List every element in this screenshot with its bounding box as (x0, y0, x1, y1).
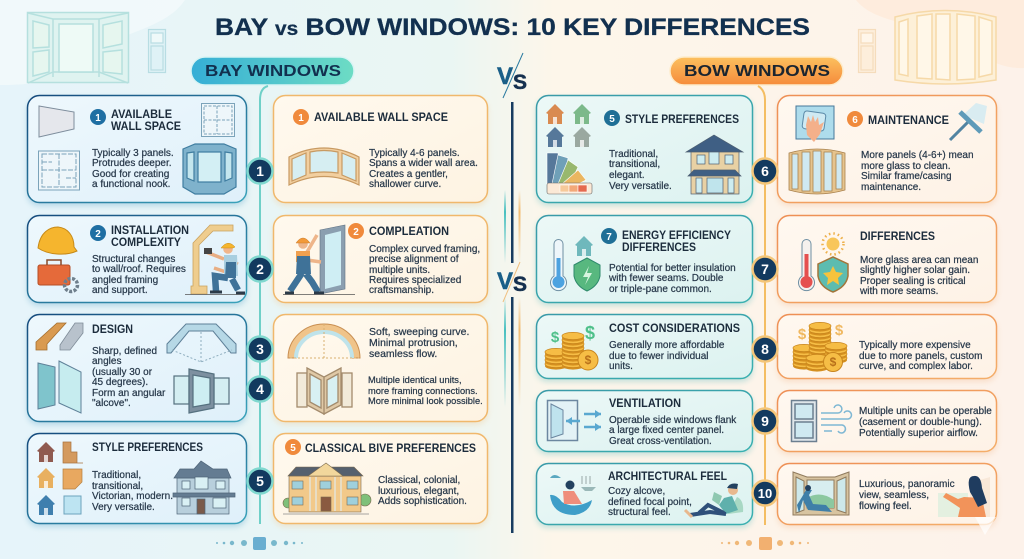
background blob left (0, 0, 185, 85)
icon: sun (822, 234, 844, 254)
body text: Cozy alcove, (608, 486, 665, 497)
badge 7: 7 (606, 232, 612, 243)
icon: folding window (297, 368, 352, 414)
decorative bow window illustration (895, 10, 996, 84)
panel: bow 2 compleation (273, 216, 488, 306)
body text: and support. (92, 285, 148, 296)
panel: bow 3 and 4 (273, 314, 488, 425)
body text: view, seamless, (859, 490, 929, 501)
heading: AVAILABLE WALL SPACE (314, 112, 448, 124)
VS mark top: V (497, 63, 513, 90)
icon: floor plan small (202, 104, 234, 136)
body text: Similar frame/casing (861, 171, 952, 182)
title: BAY vs BOW WINDOWS: 10 KEY DIFFERENCES (215, 14, 810, 41)
body text: or triple-pane common. (609, 284, 712, 295)
icon: helmet (38, 227, 77, 254)
icon: wood and metal samples (36, 323, 83, 350)
heading pill: bay windows: BAY WINDOWS (205, 63, 341, 80)
badge 2 (90, 225, 106, 241)
icon: angled plan (167, 324, 236, 362)
badge 1: 1 (95, 113, 101, 124)
body text: Potential for better insulation (609, 263, 736, 274)
body text: angled framing (92, 275, 158, 286)
timeline nodes bay: 2 (256, 261, 264, 277)
body text: Adds sophistication. (378, 496, 467, 507)
body text: Operable side windows flank (609, 415, 737, 426)
icon: thermometer hot (798, 240, 814, 291)
badge 1 (293, 109, 309, 125)
body text: due to fewer individual (609, 351, 709, 362)
panel: bow 1 available wall space (273, 96, 488, 206)
decorative footer dots right (721, 537, 809, 550)
icon: panoramic window (793, 472, 849, 515)
VS mark bottom: S (513, 273, 527, 296)
badge 5 (604, 110, 620, 126)
heading: STYLE PREFERENCES (625, 114, 739, 126)
body text: Typically 3 panels. (92, 148, 174, 159)
icon: gear (64, 278, 78, 292)
icon: wall (39, 106, 74, 137)
icon: coins: $ (835, 322, 844, 339)
badge 5: 5 (290, 443, 296, 454)
body text: "alcove". (92, 398, 131, 409)
body text: Traditional, (609, 149, 658, 160)
icon: wind (821, 405, 851, 433)
body text: Luxurious, panoramic (859, 479, 955, 490)
heading: CLASSICAL BIVE PREFERENCES (305, 443, 476, 455)
panel: energy efficiency differences (536, 216, 753, 306)
badge 1: 1 (298, 113, 304, 124)
icon: coins (793, 322, 847, 372)
badge 6: 6 (852, 115, 858, 126)
icon: two storey house (686, 135, 743, 194)
centre divider lines (504, 102, 520, 533)
timeline nodes bow: 10 (758, 486, 772, 501)
panel: architectural feel (536, 464, 753, 528)
badge 6 (847, 111, 863, 127)
icon: bay unit (174, 369, 229, 413)
timeline nodes bay: 4 (256, 381, 264, 397)
panel: bay 2 installation complexity (27, 216, 247, 306)
panel: bow cost (777, 314, 997, 382)
body text: units: more framing connections. (368, 386, 478, 396)
icon: classical building (283, 463, 371, 514)
body text: transitional, (609, 159, 660, 170)
heading: COMPLEXITY (111, 237, 181, 249)
timeline nodes bay: 1 (256, 163, 264, 179)
VS mark top (497, 53, 527, 98)
body text: precise alignment of (369, 254, 459, 265)
body text: more glass to clean. (861, 161, 950, 172)
body text: Good for creating (92, 169, 169, 180)
body text: transitional, (92, 481, 143, 492)
body text: Spans a wider wall area. (369, 158, 478, 169)
body text: Proper sealing is critical (860, 276, 966, 287)
badge 5: 5 (609, 114, 615, 125)
icon: side window and pane (38, 361, 81, 413)
body text: Traditional, (92, 470, 141, 481)
heading: ENERGY EFFICIENCY (622, 230, 731, 242)
panel: bow architectural feel (777, 464, 997, 528)
icon: hand cleaning glass (796, 106, 834, 142)
body text: Classical, colonial, (378, 475, 460, 486)
heading: WALL SPACE (111, 121, 181, 133)
timeline spine bow (758, 86, 765, 525)
body text: angles (92, 356, 121, 367)
icon: coins: $ (551, 329, 560, 346)
badge 7 (601, 228, 617, 244)
panel: bow ventilation (777, 390, 997, 455)
heading: COMPLEATION (369, 226, 449, 238)
icon: shield (574, 258, 600, 291)
icon: person in nook (550, 475, 596, 515)
body text: elegant. (609, 170, 645, 181)
icon: houses (546, 104, 591, 147)
body text: More glass area can mean (860, 255, 978, 266)
body text: Protrudes deeper. (92, 158, 172, 169)
body text: structural feel. (608, 507, 671, 518)
decorative footer dots left (216, 537, 303, 550)
icon: bow panels (789, 149, 845, 194)
icon: double hung window (792, 400, 816, 442)
decorative small window right (858, 30, 876, 72)
timeline nodes bow: 9 (761, 413, 769, 429)
panel: bow 5 classical preferences (273, 434, 488, 527)
body text: Typically more expensive (859, 340, 971, 351)
icon: reading man (685, 484, 743, 517)
VS mark top: S (513, 71, 527, 94)
body text: to wall/roof. Requires (92, 264, 186, 275)
body text: slightly higher solar gain. (860, 265, 970, 276)
body text: Structural changes (92, 254, 175, 265)
body text: curve: Minimal protrusion, (369, 337, 458, 349)
badge 2: 2 (95, 229, 101, 240)
icon: worker with door (283, 225, 355, 294)
icon: coins (545, 323, 598, 370)
icon: window with arrows (548, 400, 601, 440)
badge 2 (348, 223, 364, 239)
heading: STYLE PREFERENCES (92, 442, 203, 454)
icon: bow window (289, 148, 359, 185)
body text: defined focal point, (608, 497, 692, 508)
decorative bay window illustration (28, 12, 128, 83)
timeline nodes bow (752, 158, 778, 506)
timeline nodes bow: 8 (761, 341, 769, 357)
body text: Complex curved framing, (369, 244, 480, 255)
heading: DIFFERENCES (860, 231, 935, 243)
icon: arch (288, 324, 360, 358)
heading pill: bow windows (670, 57, 843, 85)
body text: Very versatile. (92, 502, 155, 513)
badge 5 (285, 439, 301, 455)
panel: bay 1 available wall space (27, 96, 247, 206)
timeline nodes bow: 7 (761, 261, 769, 277)
heading: AVAILABLE (111, 109, 172, 121)
timeline nodes bay (248, 158, 272, 494)
panel: energy-side style preferences (536, 96, 753, 206)
body text: Potentially superior airflow. (859, 428, 978, 439)
badge 1 (90, 109, 106, 125)
heading pill: bow windows: BOW WINDOWS (684, 63, 830, 80)
body text: (usually 30 or (92, 367, 153, 378)
icon: coins: $ (798, 326, 807, 343)
body text: curve: seamless flow. (369, 348, 437, 360)
panel: bow energy differences (777, 216, 997, 306)
icon: bay window (183, 144, 236, 194)
body text: with fewer seams. Double (608, 273, 724, 284)
body text: Creates a gentler, (369, 169, 448, 180)
icon: floor plan large (38, 151, 80, 190)
panel: maintenance (777, 96, 997, 206)
heading: DIFFERENCES (622, 242, 696, 254)
badge 2: 2 (353, 227, 359, 238)
icon: woman at window (938, 476, 990, 517)
body text: Multiple units can be operable (859, 406, 992, 417)
body text: 45 degrees). (92, 377, 148, 388)
VS mark bottom: V (497, 268, 513, 295)
body text: a functional nook. (92, 179, 170, 190)
timeline spine bay (260, 86, 268, 524)
body text: Generally more affordable (609, 340, 725, 351)
panel: bay 3 design (27, 314, 247, 425)
body text: shallower curve. (369, 179, 441, 190)
body text: multiple units. (369, 265, 430, 276)
icon: coins: $ (830, 355, 837, 369)
icon: small house (575, 236, 593, 256)
timeline nodes bow: 6 (761, 163, 769, 179)
body text: Typically 4-6 panels. (369, 148, 460, 159)
VS mark bottom (497, 262, 527, 302)
body text: Very versatile. (609, 181, 672, 192)
body text: (casement or double-hung). (859, 417, 982, 428)
timeline nodes bay: 3 (256, 341, 264, 357)
body text: Victorian, modern. (92, 491, 173, 502)
body text: units. (609, 361, 633, 372)
body text: Requires specialized (369, 275, 461, 286)
icon: thermometer cold (550, 240, 566, 291)
body text: curve: Soft, sweeping curve. (369, 326, 469, 338)
icon: squeegee (950, 103, 987, 140)
body text: with more seams. (859, 286, 938, 297)
body text: curve, and complex labor. (859, 361, 973, 372)
watermark mark (975, 517, 996, 535)
decorative small window left (148, 30, 166, 72)
body text: units: Multiple identical units, (368, 375, 462, 385)
body text: due to more panels, custom (859, 351, 982, 362)
timeline nodes bay: 5 (256, 473, 264, 489)
icon: coins: $ (585, 353, 592, 367)
heading: ARCHITECTURAL FEEL (608, 471, 727, 483)
icon: victorian house (173, 461, 235, 514)
body text: units: More minimal look possible. (368, 396, 483, 406)
background blob right (856, 0, 1024, 68)
body text: luxurious, elegant, (378, 486, 459, 497)
body text: Form an angular (92, 388, 166, 399)
heading: MAINTENANCE (868, 115, 949, 127)
panel: ventilation (536, 390, 753, 455)
heading: COST CONSIDERATIONS (609, 323, 740, 335)
body text: craftsmanship. (369, 285, 434, 296)
body text: More panels (4-6+) mean (861, 150, 974, 161)
icon: frame and worker (185, 225, 245, 294)
body text: flowing feel. (859, 501, 912, 512)
icon: shield with star (818, 257, 848, 292)
body text: maintenance. (861, 182, 921, 193)
body text: Sharp, defined (92, 346, 157, 357)
heading: DESIGN (92, 324, 133, 336)
heading pill: bay windows (191, 57, 354, 85)
body text: Great cross-ventilation. (609, 436, 712, 447)
icon: toolbox (38, 260, 70, 285)
heading: VENTILATION (609, 398, 681, 410)
heading: INSTALLATION (111, 225, 189, 237)
icon: style swatches (37, 442, 83, 515)
icon: coins: $ (585, 323, 595, 343)
panel: bay 5 style preferences (27, 434, 247, 527)
body text: a large fixed center panel. (609, 425, 724, 436)
icon: colour palette (547, 153, 592, 194)
panel: cost considerations (536, 314, 753, 382)
